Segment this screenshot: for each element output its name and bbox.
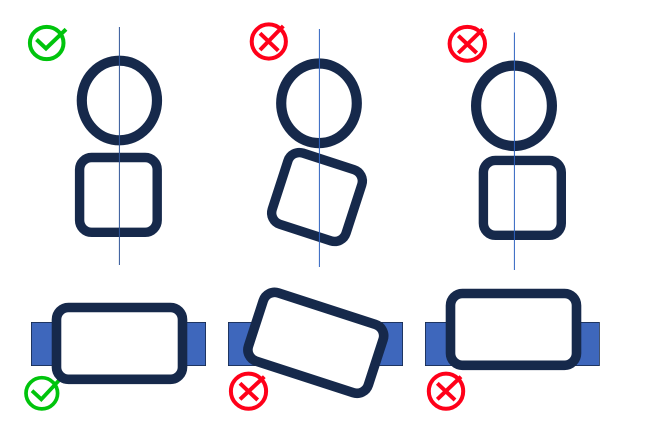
vertical axis line: [318, 29, 320, 267]
circle shape: [82, 61, 157, 140]
blue bar: [31, 322, 206, 366]
icon: red cross: [231, 374, 266, 409]
circle shape: [476, 66, 552, 146]
panel: bottom offset rectangle example: [425, 294, 599, 409]
panel: top rotated square example: [252, 24, 365, 267]
panel: top offset square example: [450, 27, 561, 270]
panel: bottom correct example: [26, 308, 206, 409]
icon: red cross: [450, 27, 485, 61]
panel: top correct example: [30, 27, 157, 265]
icon: red cross: [252, 24, 286, 59]
icon: red cross: [429, 374, 463, 409]
blue bar: [425, 322, 599, 366]
rounded square shape: [80, 158, 157, 232]
rotated rounded square shape: [269, 149, 365, 245]
vertical axis line: [513, 32, 515, 270]
rounded square shape: [483, 160, 561, 235]
rotated rounded rectangle shape: [245, 289, 387, 396]
rounded rectangle shape: [56, 308, 182, 379]
panel: bottom rotated rectangle example: [228, 289, 403, 409]
circle shape: [281, 64, 357, 143]
icon: green check: [26, 378, 60, 409]
vertical axis line: [118, 27, 120, 265]
icon: green check: [30, 27, 66, 59]
blue bar: [228, 322, 403, 366]
rounded rectangle shape: [450, 294, 576, 365]
